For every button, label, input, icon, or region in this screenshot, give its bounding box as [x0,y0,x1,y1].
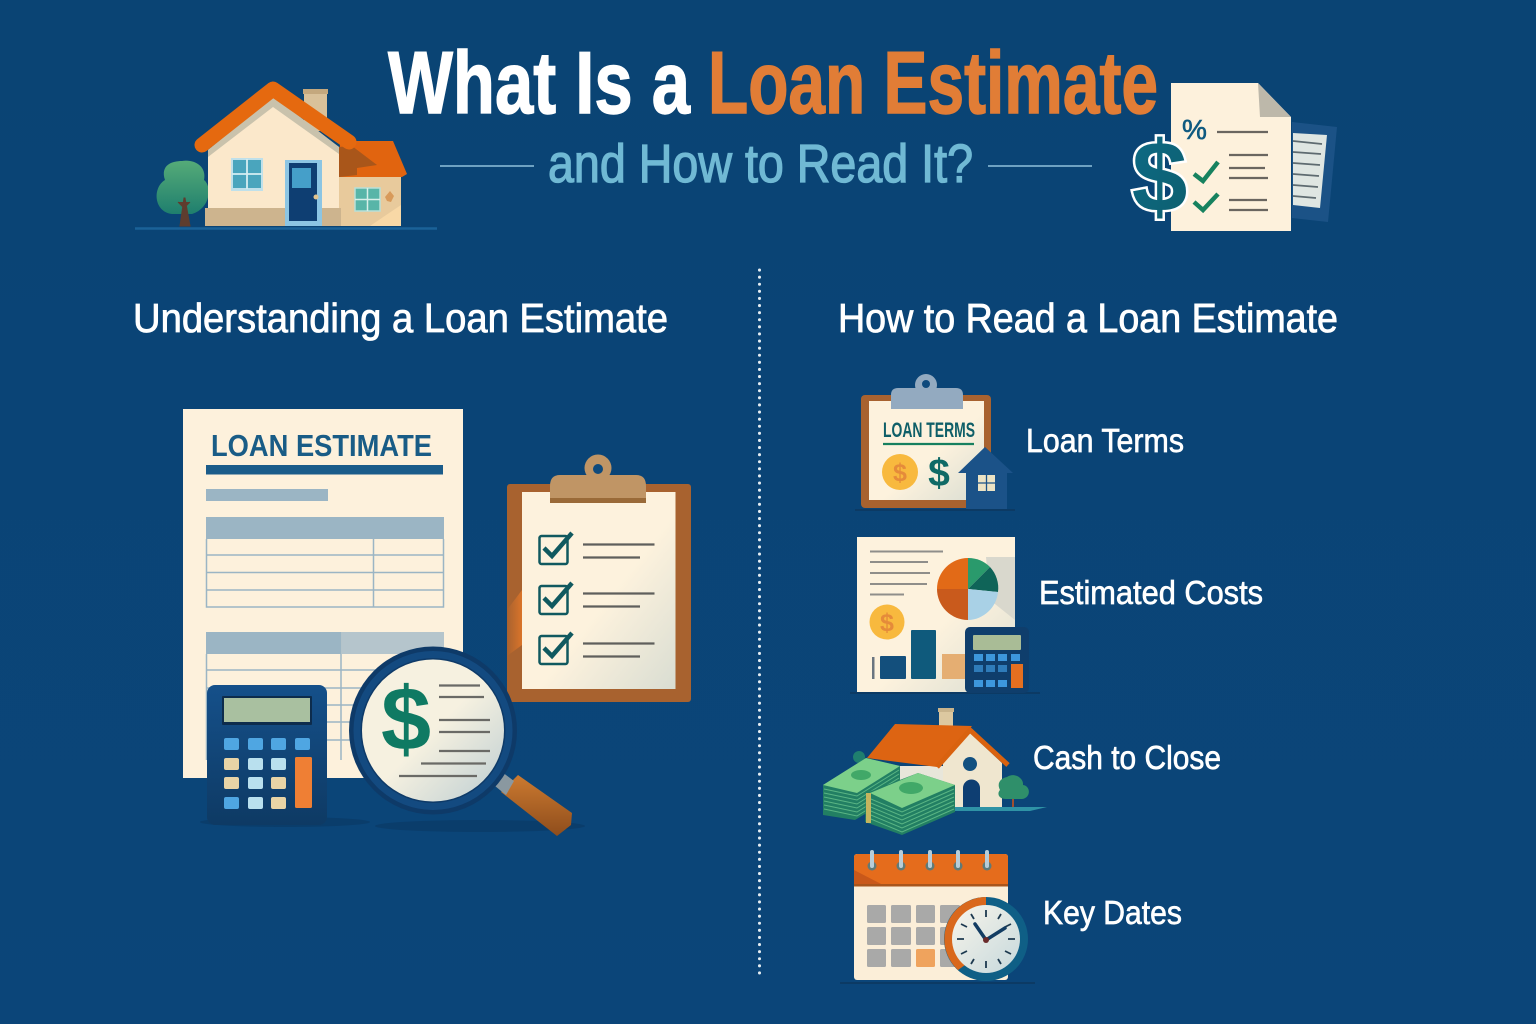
label: Cash to Close: Cash to Close [1033,739,1221,776]
list item: Cash to Close [823,708,1221,835]
subtitle: and How to Read It? [548,134,973,194]
icon: document with dollar and checks [1132,83,1337,233]
list item: Estimated Costs [850,537,1263,693]
icon: loan terms clipboard: LOAN TERMS [883,419,975,442]
title: Loan Estimate [708,33,1158,132]
icon: cost report with pie chart [850,537,1040,693]
panel: loan estimate document: LOAN ESTIMATE [211,428,432,463]
title: What Is a [388,33,691,132]
icon: magnifying glass: $ [381,670,431,770]
label: Loan Terms: Loan Terms [1026,422,1184,459]
icon: house with cash stacks [823,708,1047,835]
icon: loan terms clipboard: $ [893,459,907,487]
icon: loan terms clipboard [855,374,1015,510]
heading: Understanding a Loan Estimate: Understanding a Loan Estimate [133,295,668,341]
icon: document with dollar and checks: % [1182,114,1207,145]
icon: clipboard checklist [507,454,691,702]
title [388,33,1158,132]
list item: Loan Terms [855,374,1184,510]
icon: magnifying glass [349,646,585,836]
icon: cost report with pie chart: $ [880,609,894,637]
icon: calculator [200,685,370,827]
icon: calendar with clock [840,852,1035,983]
panel: loan estimate document [183,409,463,778]
heading: How to Read a Loan Estimate: How to Read a Loan Estimate [838,295,1338,341]
label: Estimated Costs: Estimated Costs [1039,574,1263,611]
icon: loan terms clipboard: $ [928,452,950,495]
list item: Key Dates [840,852,1182,983]
divider [758,270,761,977]
icon: house [135,89,437,228]
icon: document with dollar and checks: $ [1132,121,1187,233]
label: Key Dates: Key Dates [1043,894,1182,931]
